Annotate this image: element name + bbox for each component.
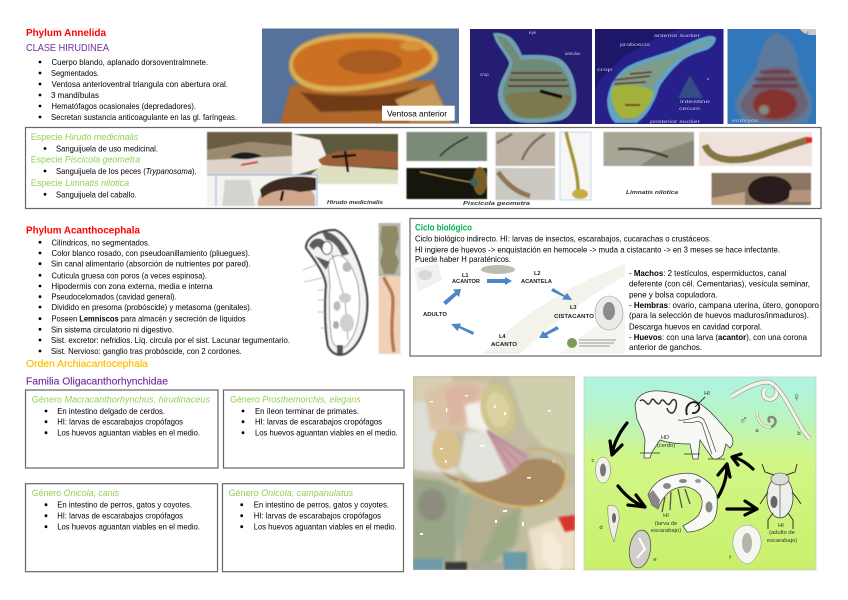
labels: pig and host symbols [592,390,801,563]
heading: Clase Hirudinea: CLASE HIRUDINEA [26,42,109,54]
species: Limnatis nilotica: Especie Limnatis nilotica [31,178,129,189]
text: life cycle description: Ciclo biológico indirecto. HI: larvas de insectos, escarabajos, cucarachas o crustáceos. [415,234,711,244]
diagram: life cycle stages: L2 [534,271,541,277]
illustration: beetle larva: (larva de [655,521,677,527]
heading: Orden Archiacantocephala: Orden Archiacantocephala [26,358,148,370]
photo: leech dorsal view: eye [529,30,537,35]
photo: leech ventral view: crop [597,67,613,72]
panel: Onicola canis: Los huevos aguantan viables en el medio. [57,522,200,532]
heading: Phylum Annelida: Phylum Annelida [26,27,106,39]
photo: leech with embryos [727,29,816,124]
list: Acanthocephala traits: Color blanco rosado, con pseudoanillamiento (pliuegues). [52,248,250,258]
heading: Phylum Acanthocephala: Phylum Acanthocephala [26,224,140,236]
panel: Onicola campanulatus: En intestino de perros, gatos y coyotes. [254,500,389,510]
panel: Macracanthorhynchus hirudinaceus: Género Macracanthorhynchus, hirudinaceus [32,395,210,406]
list: Acanthocephala traits: Sist. Nervioso: ganglio tras probóscide, con 2 cordones. [51,346,242,356]
panel: Prosthemorchis elegans [224,390,404,468]
heading: Ciclo biológico: Ciclo biológico [415,222,472,232]
illustration: adult beetle: HI [778,523,784,529]
illustration: adult beetle: escarabajo) [767,538,797,544]
photo: leech ventral view: cecum [679,106,701,111]
labels: pig and host symbols: d [599,525,603,531]
panel: Onicola canis: En intestino de perros, gatos y coyotes. [57,500,192,510]
heading: Familia Oligacanthorhynchidae: Familia Oligacanthorhynchidae [26,376,168,388]
diagram: acanthocephalan anatomy [303,230,367,355]
labels: pig and host symbols: f [729,555,731,561]
list: Hirudinea traits: Ventosa anterioventral triangula con abertura oral. [52,79,228,89]
panel: Onicola canis: HI: larvas de escarabajos cropófagos [57,511,183,521]
list: Acanthocephala traits: Poseen Lemniscos para almacén y secreción de líquidos [52,314,246,324]
panel: Onicola canis: Género Onicola, canis [32,488,119,499]
list: Acanthocephala traits: Pseudocelomados (cavidad general). [52,292,177,302]
photo: leech dorsal view: annulus [565,51,581,56]
text: life cycle description: Puede haber H paraténicos. [415,254,511,264]
illustration: adult beetle [760,464,801,544]
text: life cycle description [415,234,780,264]
diagram: life cycle stages: ACANTELA [521,279,552,285]
photos: Hirudo medicinalis [207,132,398,206]
labels: pig and host symbols: a [755,428,759,434]
list: Acanthocephala traits: Dividido en presoma (probóscide) y metasoma (genitales). [52,302,252,312]
species detail: Sanguijuela de uso medicinal. [56,143,158,153]
photo: leech dorsal view: crop [480,72,489,77]
species: Hirudo medicinalis: Especie Hirudo medicinalis [31,132,138,143]
labels: pig and host symbols: ♀ [792,390,801,404]
illustration: beetle larva: HI [663,513,669,519]
panel: Macracanthorhynchus hirudinaceus [26,390,218,468]
species: Piscicola geometra: Especie Piscicola geometra [31,154,140,166]
text: male, female and egg anatomy: - Machos: 2 testículos, espermiductos, canal [629,268,787,278]
illustration: beetle larva [648,473,717,534]
diagram: life cycle stages: ADULTO [423,312,448,318]
list: Acanthocephala traits: Sin sistema circulatorio ni digestivo. [51,324,174,334]
text: life cycle description: HI ingiere de huevos -> enquistación en hemocele -> muda a cistacanto -> en 3 meses se hace infectante. [415,244,780,254]
photo: leech ventral view: posterior sucker [650,119,701,124]
photo: leech with embryos: ♂ [805,31,810,37]
text: male, female and egg anatomy: - Huevos: con una larva (acantor), con una corona [629,332,807,342]
label: Ventosa anterior: Ventosa anterior [387,108,447,118]
panel: Macracanthorhynchus hirudinaceus: Los huevos aguantan viables en el medio. [57,428,200,438]
panel: Macracanthorhynchus hirudinaceus: HI: larvas de escarabajos cropófagos [57,417,183,427]
text: male, female and egg anatomy: (para la selección de huevos maduros/inmaduros). [629,310,809,320]
labels: pig and host symbols: ♂ [739,413,748,427]
labels: pig and host symbols: c [592,458,595,464]
text: male, female and egg anatomy [629,268,819,352]
panel: Prosthemorchis elegans: Género Prosthemorchis, elegans [230,395,361,406]
photo: acanthocephalan specimen [378,223,400,354]
list: Hirudinea traits [39,57,237,122]
list: Hirudinea traits: Segmentados. [51,68,99,78]
panel: Hirudinea species [26,128,821,208]
label: Ventosa anterior [382,106,455,121]
panel: ciclo biológico [410,218,821,356]
photos: Piscicola geometra [406,132,591,207]
photo: leech ventral view: proboscis [620,42,651,47]
list: Hirudinea traits: Hematófagos ocasionales (depredadores). [52,101,196,111]
photos: Limnatis nilotica: Limnatis nilotica [626,190,678,196]
photos: Hirudo medicinalis: Hirudo medicinalis [327,200,383,206]
photo: leech ventral view: anterior sucker [654,33,701,38]
photo: leech ventral view: intestine [680,99,711,104]
panel: Onicola campanulatus: Género Onicola, campanulatus [228,488,353,499]
panel: Onicola canis [26,484,218,572]
diagram: life cycle stages: L1 [462,273,469,279]
text: male, female and egg anatomy: Descarga huevos en cavidad corporal. [629,322,762,332]
list: Hirudinea traits: Secretan sustancia anticoagulante en las gl. faríngeas. [51,112,237,122]
labels: pig and host symbols: HD [661,435,669,441]
diagram: life cycle stages: L3 [570,305,577,311]
illustration: adult worms [731,382,810,439]
photo: leech ventral view [595,29,724,124]
photo: anterior sucker [262,28,460,124]
diagram: life cycle stages: ACANTOR [452,279,480,285]
diagram: Macracanthorhynchus life cycle [584,377,816,570]
photo: leech with embryos: embryos [732,118,759,123]
panel: Prosthemorchis elegans: En íleon terminar de primates. [255,406,359,416]
diagram: life cycle stages: ACANTO [491,342,518,348]
panel: Prosthemorchis elegans: HI: larvas de escarabajos cropófagos [255,417,382,427]
panel: Prosthemorchis elegans: Los huevos aguantan viables en el medio. [255,428,398,438]
photos: Limnatis nilotica [604,132,812,205]
panel: Onicola campanulatus: Los huevos aguantan viables en el medio. [254,522,397,532]
list: Hirudinea traits: 3 mandíbulas [51,90,99,100]
list: Acanthocephala traits: Cilíndricos, no segmentados. [52,237,150,247]
species detail: Sanguijuela de los peces (Trypanosoma). [56,166,197,176]
photo: leech dorsal view [470,29,592,124]
panel: Onicola campanulatus: HI: larvas de escarabajos cropófagos [254,511,381,521]
list: Acanthocephala traits: Sist. excretor: nefridios. Líq. circula por el sist. Lacunar tegumentario. [51,335,290,345]
illustration: adult beetle: (adulto de [769,530,795,536]
list: Acanthocephala traits [39,237,290,356]
labels: pig and host symbols: e [653,557,657,563]
text: male, female and egg anatomy: anterior de ganchos. [629,342,702,352]
panel: Macracanthorhynchus hirudinaceus: En intestino delgado de cerdos. [57,406,165,416]
labels: pig and host symbols: (cerdo) [657,443,675,449]
diagram: life cycle stages: CISTACANTO [554,314,595,320]
diagram: life cycle stages [414,264,625,354]
photos: Piscicola geometra: Piscicola geometra [463,201,530,207]
text: male, female and egg anatomy: - Hembras: ovario, campana uterina, útero, gonoporo [629,300,819,310]
diagram: life cycle stages: L4 [499,334,506,340]
text: male, female and egg anatomy: pene y bolsa copuladora. [629,290,718,300]
illustration: pig definitive host [635,391,733,459]
list: Acanthocephala traits: Cutícula gruesa con poros (a veces espinosa). [52,270,207,280]
panel: Onicola campanulatus [222,484,404,572]
labels: pig and host symbols: HI [704,391,710,397]
arrows: life cycle [610,423,757,515]
labels: pig and host symbols: b [797,431,801,437]
list: Acanthocephala traits: Hipodermis con zona externa, media e interna [52,281,213,291]
illustration: eggs and larval stages [596,457,761,569]
illustration: beetle larva: escarabajo) [651,528,681,534]
photo: intestine with acanthocephalans [413,376,576,574]
species detail: Sanguijuela del caballo. [56,189,137,199]
list: Hirudinea traits: Cuerpo blando, aplanado dorsoventralmnete. [52,57,208,67]
list: Acanthocephala traits: Sin canal alimentario (absorción de nutrientes por pared). [51,259,251,269]
text: male, female and egg anatomy: deferente (con cél. Cementarias), vesícula seminar, [629,279,810,289]
